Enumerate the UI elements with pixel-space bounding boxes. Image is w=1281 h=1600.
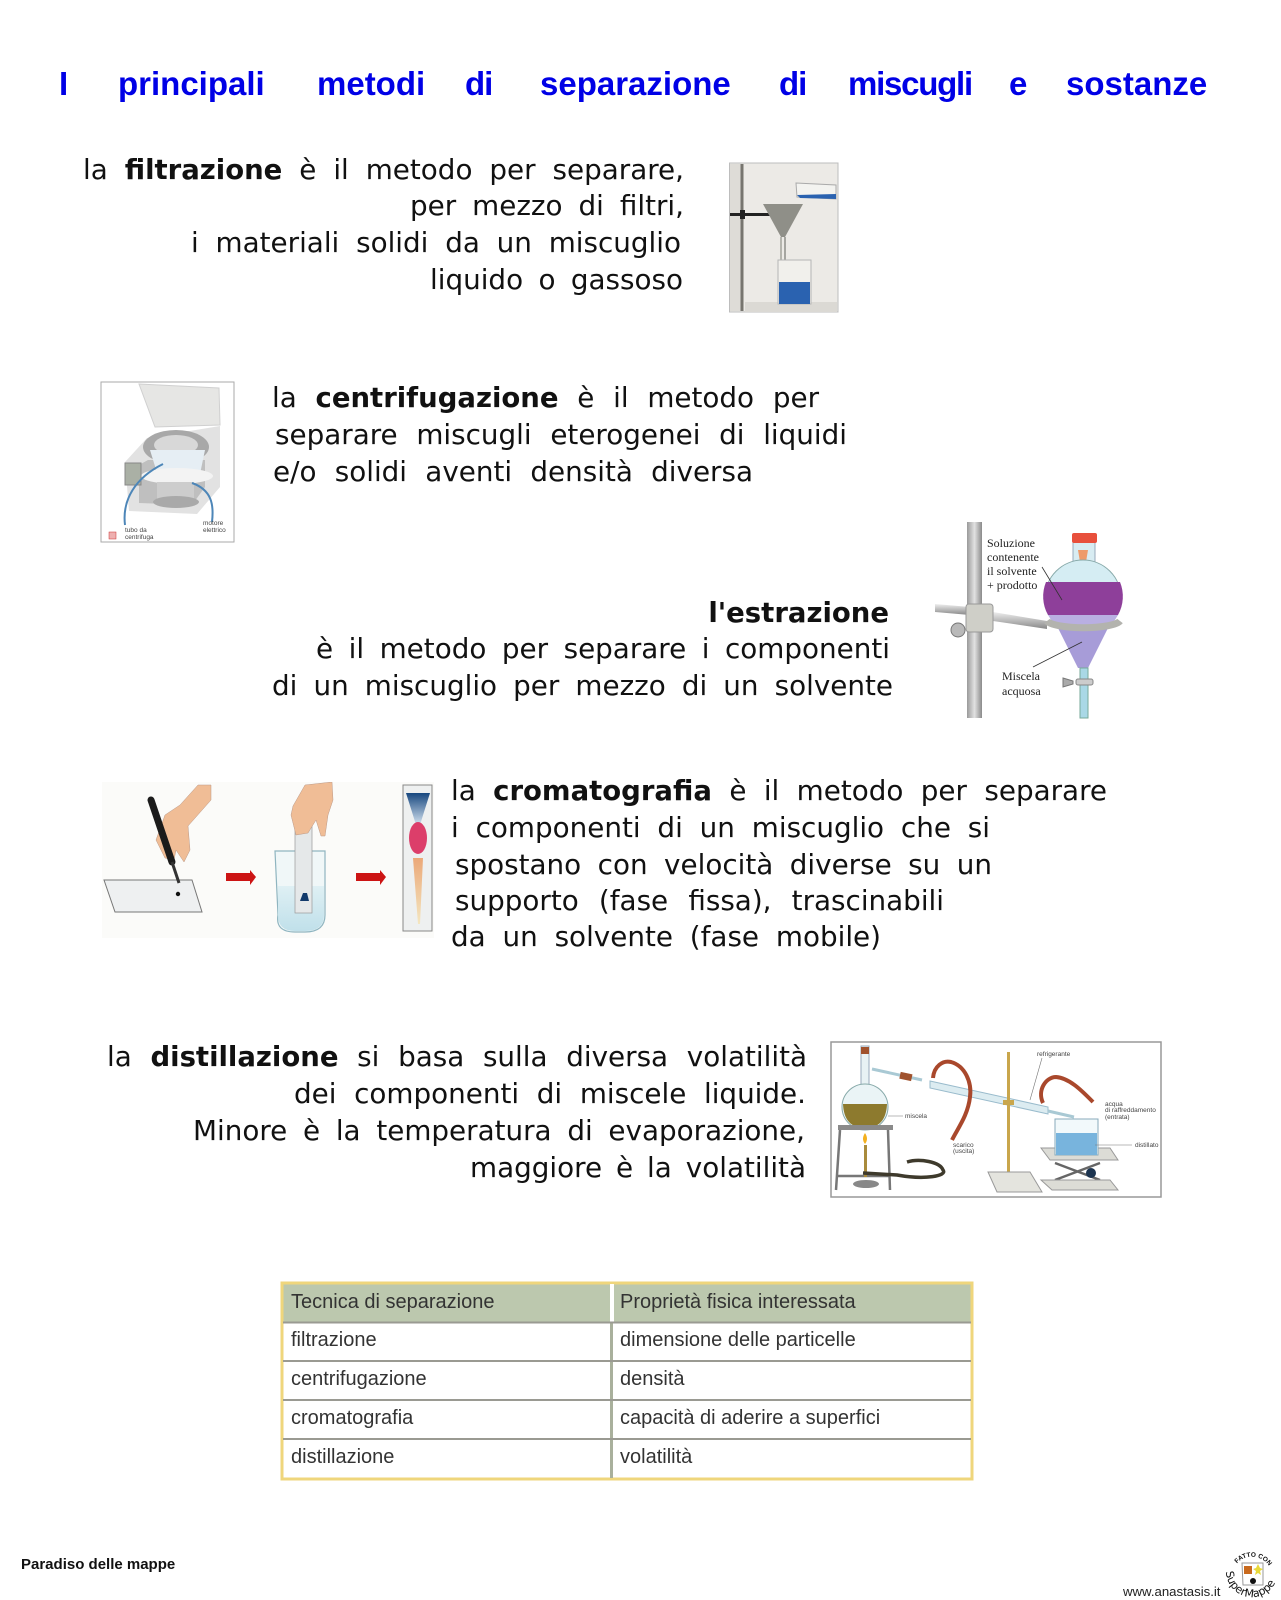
text: Tecnica di separazione (291, 1291, 494, 1313)
icon: centrifuge illustration: elettrico (203, 527, 226, 534)
text: l'estrazione (708, 597, 889, 629)
icon: SuperMappe logo (1226, 1552, 1275, 1598)
labels: refrigerante (1037, 1051, 1071, 1058)
tripod and burner (838, 1125, 893, 1130)
icon: centrifuge illustration: tubo da (125, 527, 147, 534)
text: liquido o gassoso (430, 263, 683, 296)
text: separazione (540, 65, 731, 102)
labels: miscela (905, 1113, 927, 1120)
hoses (933, 1062, 970, 1140)
text: per mezzo di filtri, (410, 189, 684, 222)
text: densità (620, 1368, 684, 1390)
labels: di raffreddamento (1105, 1107, 1156, 1114)
text: e/o solidi aventi densità diversa (273, 455, 753, 488)
beaker (275, 851, 325, 932)
labels: scarico (953, 1142, 974, 1149)
second hand (291, 782, 333, 836)
text: da un solvente (fase mobile) (451, 920, 881, 953)
footer label: Paradiso delle mappe (21, 1556, 175, 1573)
second arrow (356, 870, 386, 885)
text: di un miscuglio per mezzo di un solvente (272, 669, 893, 702)
flask (861, 1046, 869, 1086)
icon: centrifuge illustration: centrifuga (125, 534, 154, 541)
first arrow (226, 870, 256, 885)
text: centrifugazione (291, 1368, 427, 1390)
text: di (779, 65, 806, 102)
icon: separating funnel illustration (935, 522, 1123, 718)
developed strip (403, 785, 432, 931)
icon: distillation apparatus illustration (830, 1041, 1162, 1198)
text: supporto (fase fissa), trascinabili (455, 884, 944, 917)
text: la cromatografia è il metodo per separare (451, 774, 1107, 807)
icon: centrifuge illustration: motore (203, 520, 224, 527)
icon: centrifuge illustration (100, 382, 234, 542)
text block: distillazione (107, 1040, 807, 1184)
icon: separating funnel illustration: acquosa (1002, 684, 1041, 698)
text: sostanze (1066, 65, 1207, 102)
icon: separating funnel illustration: contenente (987, 550, 1039, 564)
text: Proprietà fisica interessata (620, 1291, 856, 1313)
text: la distillazione si basa sulla diversa volatilità (107, 1040, 807, 1073)
labels: distillato (1135, 1142, 1159, 1149)
footer url: www.anastasis.it (1123, 1584, 1220, 1599)
text: spostano con velocità diverse su un (455, 848, 992, 881)
lab jack (1041, 1148, 1118, 1160)
table: separation techniques (280, 1282, 974, 1480)
text: dei componenti di miscele liquide. (294, 1077, 806, 1110)
text: capacità di aderire a superfici (620, 1407, 880, 1429)
text: I (59, 65, 68, 102)
text: e (1009, 65, 1027, 102)
icon: separating funnel illustration: Soluzione (987, 536, 1035, 550)
labels: (entrata) (1105, 1114, 1130, 1121)
text: la filtrazione è il metodo per separare, (83, 153, 684, 186)
text block: filtrazione (83, 153, 684, 296)
text: miscugli (848, 65, 972, 102)
text: maggiore è la volatilità (470, 1151, 806, 1184)
icon: separating funnel illustration: Miscela (1002, 669, 1041, 683)
text: i materiali solidi da un miscuglio (191, 226, 681, 259)
text block: cromatografia (451, 774, 1107, 953)
text: la centrifugazione è il metodo per (272, 381, 819, 414)
icon: filtration apparatus photo (729, 162, 838, 312)
text: è il metodo per separare i componenti (316, 632, 890, 665)
text: volatilità (620, 1446, 692, 1468)
text: dimensione delle particelle (620, 1329, 856, 1351)
stand (1007, 1052, 1010, 1174)
icon: SuperMappe logo: FATTO CON (1234, 1552, 1272, 1566)
text block: estrazione (272, 597, 893, 702)
text block: centrifugazione (272, 381, 847, 488)
text: cromatografia (291, 1407, 413, 1429)
text: filtrazione (291, 1329, 377, 1351)
text: metodi (317, 65, 425, 102)
labels: (uscita) (953, 1148, 974, 1155)
labels (905, 1051, 1159, 1155)
title (59, 65, 1207, 102)
collecting beaker (1055, 1119, 1098, 1155)
icon: separating funnel illustration: + prodotto (987, 578, 1037, 592)
hand and pen (156, 785, 211, 862)
text: Minore è la temperatura di evaporazione, (193, 1114, 805, 1147)
text: separare miscugli eterogenei di liquidi (275, 418, 847, 451)
paper sheet (104, 880, 202, 912)
condenser (872, 1069, 922, 1080)
text: distillazione (291, 1446, 394, 1468)
icon: separating funnel illustration: il solvente (987, 564, 1037, 578)
text: i componenti di un miscuglio che si (451, 811, 990, 844)
icon: chromatography illustration (103, 782, 432, 933)
text: principali (118, 65, 265, 102)
labels: acqua (1105, 1101, 1123, 1108)
text: di (465, 65, 492, 102)
